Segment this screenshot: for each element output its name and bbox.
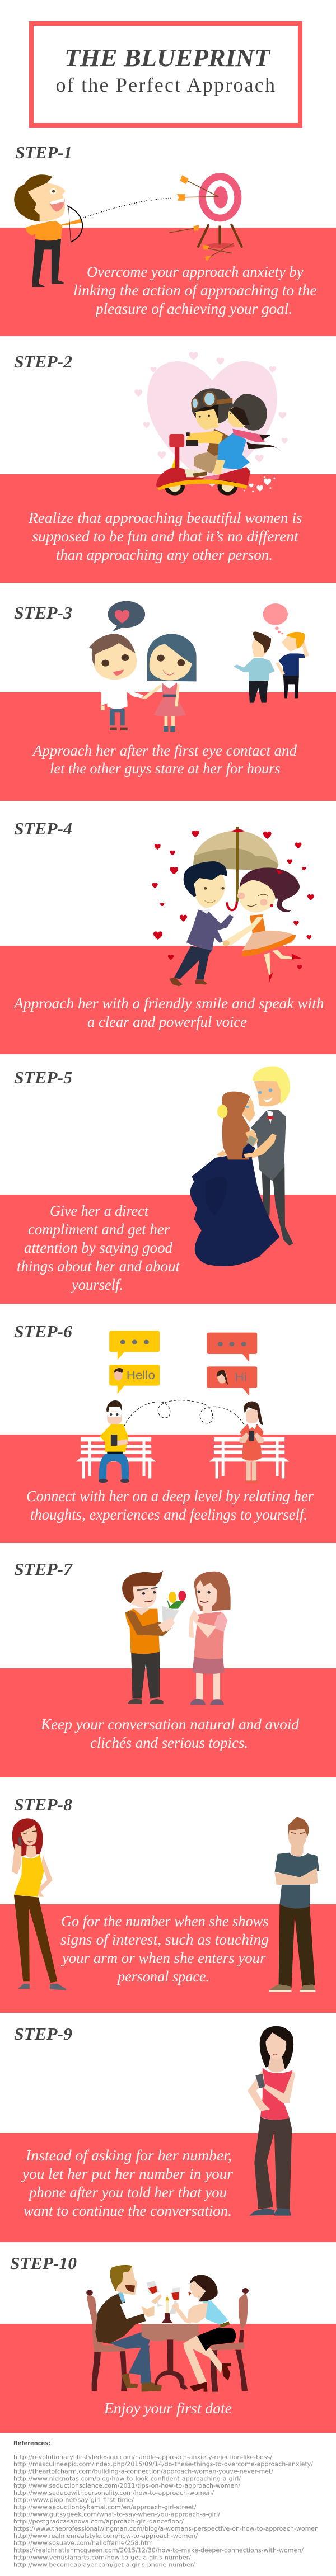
text block: step 3: let the other guys stare at her for hours [50, 760, 281, 777]
references list [13, 2454, 319, 2568]
band: step 2 [0, 474, 336, 583]
references list: https://realchristianmcqueen.com/2015/12/30/how-to-make-deeper-connections-with-women/ [13, 2547, 304, 2554]
references [13, 2440, 319, 2568]
references list: http://www.seducewithpersonality.com/how-to-approach-women/ [13, 2489, 214, 2497]
text block: step 8: signs of interest, such as touching [60, 1931, 269, 1948]
text block: step 7: clichés and serious topics. [90, 1734, 248, 1751]
text block: step 9: you let her put her number in your [21, 2165, 233, 2182]
text block: step 9: Instead of asking for her number, [25, 2147, 232, 2164]
references list: http://www.gutsygeek.com/what-to-say-when-you-approach-a-girl/ [13, 2511, 220, 2518]
references list: http://www.seductionbykamal.com/en/approach-girl-street/ [13, 2503, 197, 2511]
illustration: chat bubbles and people on benches [76, 1331, 290, 1484]
text block: step 8 [60, 1913, 269, 1985]
text block: step 6: thoughts, experiences and feelings to yourself. [30, 1506, 307, 1523]
panel: step 10 [0, 2253, 336, 2433]
text block: step 6: Connect with her on a deep level by relating her [26, 1488, 314, 1504]
illustration: chat bubbles and people on benches: Hi [235, 1370, 246, 1384]
references list: http://www.seductionscience.com/2011/tips-on-how-to-approach-women/ [13, 2482, 240, 2489]
illustration: couple on a date at table [86, 2265, 249, 2392]
panel: step 2 [0, 352, 336, 583]
text block: step 10: Enjoy your first date [104, 2400, 232, 2417]
panel: step 4 [0, 819, 336, 1054]
illustration: couple holding hands and two men watching [89, 601, 309, 732]
band: step 3 [0, 692, 336, 801]
text block: step 7: Keep your conversation natural and avoid [40, 1716, 299, 1733]
references list: http://revolutionarylifestyledesign.com/handle-approach-anxiety-rejection-like-boss/ [13, 2454, 272, 2461]
text block: step 9 [21, 2147, 233, 2219]
heading: step 9: STEP-9 [14, 2024, 72, 2044]
text block: step 5 [17, 1202, 180, 1293]
heading: step 5: STEP-5 [14, 1068, 72, 1087]
panel: step 8 [0, 1795, 336, 2013]
heading: step 4: STEP-4 [14, 819, 72, 838]
text block: step 5: Give her a direct [50, 1202, 149, 1219]
illustration: couple on scooter [134, 352, 288, 496]
references list: http://www.venusianarts.com/how-to-get-a-girls-number/ [13, 2554, 191, 2561]
illustration: chat bubbles and people on benches: Hello [127, 1368, 155, 1382]
heading: step 10: STEP-10 [10, 2253, 77, 2273]
references list: http://masculineepic.com/index.php/2015/09/14/do-these-things-to-overcome-approach-anxiety/ [13, 2461, 313, 2468]
references list: http://www.piop.net/say-girl-first-time/ [13, 2497, 134, 2503]
text block: step 2: Realize that approaching beautiful women is [28, 509, 302, 526]
title box [31, 23, 300, 125]
text block: step 1: linking the action of approaching to the [73, 282, 317, 299]
text block: step 2: supposed to be fun and that it’s no different [32, 528, 299, 545]
text block: step 7 [40, 1716, 299, 1751]
text block: step 4: a clear and powerful voice [87, 1013, 247, 1030]
panel: step 3 [0, 601, 336, 801]
text block: step 8: your arm or when she enters your [60, 1950, 266, 1966]
text block: step 2: than approaching any other person. [56, 546, 273, 563]
title heading: THE BLUEPRINT [64, 44, 271, 72]
references list: http://www.realmenrealstyle.com/how-to-approach-women/ [13, 2532, 198, 2540]
heading: step 6: STEP-6 [14, 1322, 72, 1341]
text block: step 9: phone after you told her that you [28, 2184, 227, 2201]
text block: step 9: want to continue the conversation. [24, 2202, 232, 2219]
text block: step 1: Overcome your approach anxiety by [87, 263, 304, 280]
text block: step 1: pleasure of achieving your goal. [95, 300, 292, 317]
illustration: couple under umbrella with hearts [152, 827, 314, 986]
title subheading: of the Perfect Approach [56, 74, 275, 96]
text block: step 3: Approach her after the first eye contact and [32, 742, 297, 759]
text block: step 5: attention by saying good [24, 1239, 172, 1256]
text block: step 5: compliment and get her [28, 1221, 170, 1238]
text block: step 6 [26, 1488, 314, 1523]
text block: step 8: Go for the number when she shows [61, 1913, 269, 1929]
panel: step 7 [0, 1559, 336, 1777]
text block: step 5: things about her and about [17, 1258, 180, 1275]
references list: http://www.nicknotas.com/blog/how-to-look-confident-approaching-a-girl/ [13, 2475, 241, 2482]
band: step 1 [0, 228, 336, 336]
text block: step 2 [28, 509, 302, 563]
band: step 8 [0, 1904, 336, 2013]
heading: step 3: STEP-3 [14, 603, 72, 622]
references list: http://www.becomeaplayer.com/get-a-girls-phone-number/ [13, 2561, 195, 2568]
references list: http://www.sosuave.com/halloffame/258.htm [13, 2539, 153, 2547]
heading: step 7: STEP-7 [14, 1559, 73, 1579]
band: step 4 [0, 946, 336, 1054]
text block: step 3 [32, 742, 297, 777]
heading: step 8: STEP-8 [14, 1795, 72, 1814]
illustration: man giving flowers to woman [122, 1570, 231, 1705]
heading: step 1: STEP-1 [15, 143, 72, 162]
panel: step 6 [0, 1322, 336, 1543]
text block: step 5: yourself. [70, 1276, 123, 1293]
band: step 5 [0, 1195, 336, 1304]
references list: https://www.theprofessionalwingman.com/blog/a-womans-perspective-on-how-to-approach-women [13, 2525, 319, 2532]
illustration: couple in formal dress [190, 1066, 293, 1266]
band: step 9 [0, 2133, 336, 2242]
illustration: woman with phone [248, 2026, 295, 2216]
panel: step 5 [0, 1066, 336, 1304]
references heading: References: [13, 2440, 50, 2447]
illustration: woman on phone [12, 1818, 67, 1990]
references list: http://theartofcharm.com/building-a-connection/approach-woman-youve-never-met/ [13, 2468, 273, 2475]
text block: step 8: personal space. [116, 1968, 209, 1985]
panel: step 1 [0, 143, 336, 336]
band: step 6 [0, 1435, 336, 1543]
text block: step 4: Approach her with a friendly smile and speak with [13, 995, 324, 1012]
references list: http://postgradcasanova.com/approach-girl-dancefloor/ [13, 2518, 184, 2525]
band: step 7 [0, 1668, 336, 1777]
band: step 10 [0, 2324, 336, 2433]
text block: step 4 [13, 995, 324, 1030]
illustration: archer and target [14, 173, 242, 287]
text block: step 1 [73, 263, 317, 317]
heading: step 2: STEP-2 [14, 352, 72, 371]
illustration: man with crossed arms [269, 1817, 319, 1992]
panel: step 9 [0, 2024, 336, 2242]
